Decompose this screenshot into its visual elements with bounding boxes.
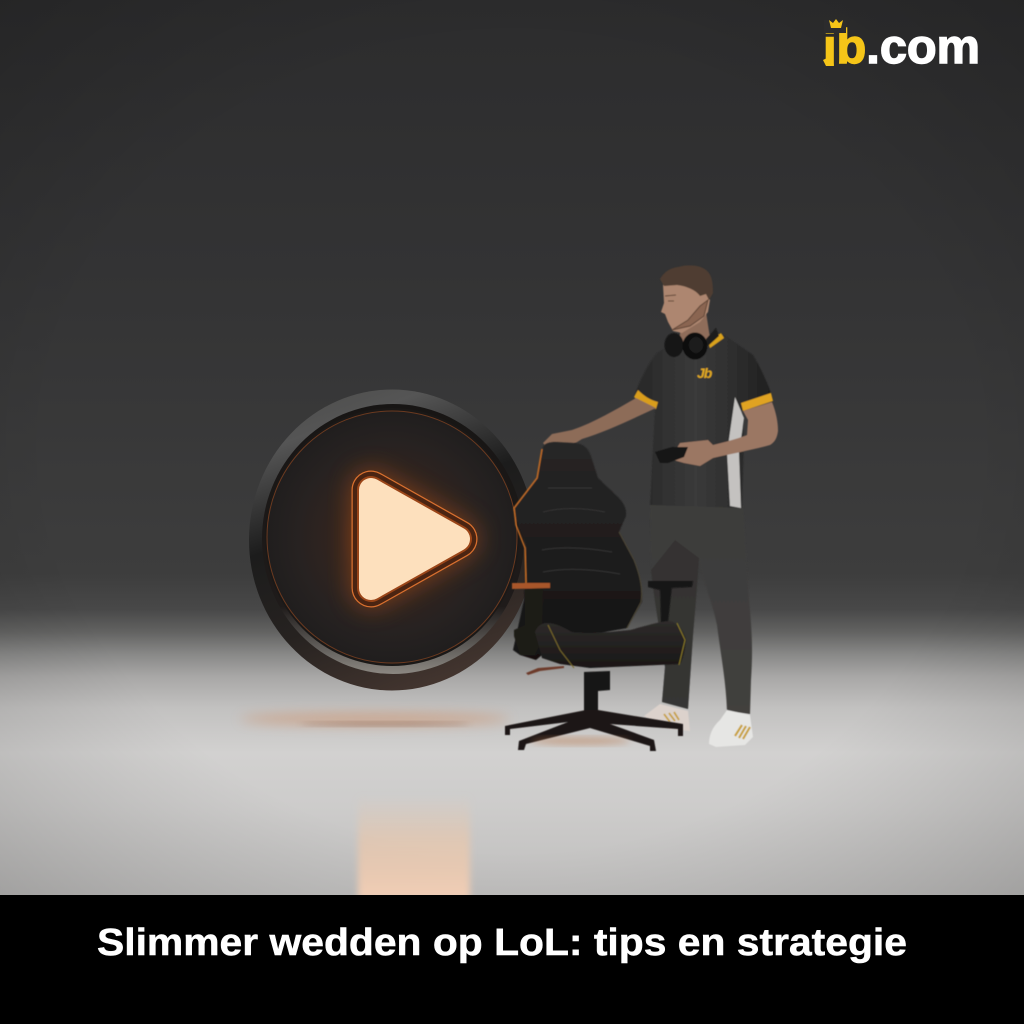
chair orange piping	[514, 449, 542, 583]
chair back stitching	[542, 488, 620, 574]
seat	[535, 621, 686, 668]
gas column	[584, 671, 610, 712]
left shoe	[644, 704, 690, 731]
collar	[708, 333, 724, 348]
right arm and hand	[670, 402, 778, 466]
shirt logo: Jb	[697, 365, 713, 381]
caption title: Slimmer wedden op LoL: tips en strategie	[97, 922, 907, 964]
game controller	[655, 447, 688, 463]
seat lever	[526, 666, 564, 675]
right sleeve cuff	[741, 393, 773, 411]
chair right piping	[619, 532, 642, 628]
trouser leg shading	[651, 540, 699, 709]
hair	[660, 265, 713, 300]
disc outer rim	[249, 390, 535, 690]
play button disc	[249, 390, 535, 690]
disc inner groove	[265, 408, 519, 666]
logo crown	[824, 20, 846, 33]
face	[661, 282, 710, 333]
right armrest	[648, 581, 693, 622]
shirt	[634, 334, 772, 508]
floor shadow with orange glow	[240, 713, 510, 726]
logo wordmark: jb.com	[822, 21, 980, 74]
left armrest	[512, 583, 550, 655]
left sleeve cuff	[634, 390, 658, 409]
face shading: brow, eye and jaw	[665, 295, 708, 330]
chair floor shadow	[530, 737, 630, 745]
headphones	[664, 328, 719, 360]
floor reflection of play icon	[358, 795, 470, 899]
right shoe	[709, 710, 753, 747]
gaming chair	[505, 442, 693, 751]
shirt white side panel	[727, 397, 744, 508]
logo j hook	[823, 57, 834, 66]
logo: jb.com	[823, 19, 978, 66]
logo crown glyph	[829, 19, 843, 28]
left arm and hand	[543, 398, 656, 453]
play icon glow	[371, 490, 458, 588]
chair back	[513, 442, 642, 660]
play icon	[371, 490, 458, 588]
disc inner ring	[262, 404, 524, 674]
neck	[680, 312, 710, 350]
disc face	[267, 411, 517, 663]
gamer figure	[543, 265, 778, 747]
five-star base	[505, 710, 683, 751]
trousers	[650, 505, 752, 714]
caption banner	[0, 895, 1024, 1024]
